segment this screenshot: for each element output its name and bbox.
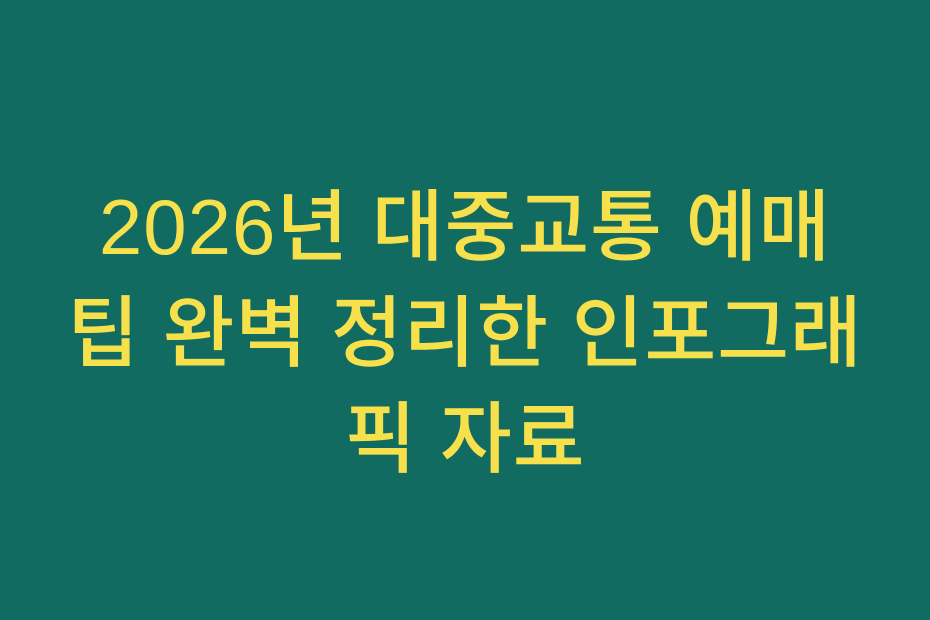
title: 2026년 대중교통 예매 xyxy=(99,183,831,271)
title xyxy=(67,183,863,483)
title: 픽 자료 xyxy=(345,395,585,483)
title: 팁 완벽 정리한 인포그래 xyxy=(67,289,863,377)
